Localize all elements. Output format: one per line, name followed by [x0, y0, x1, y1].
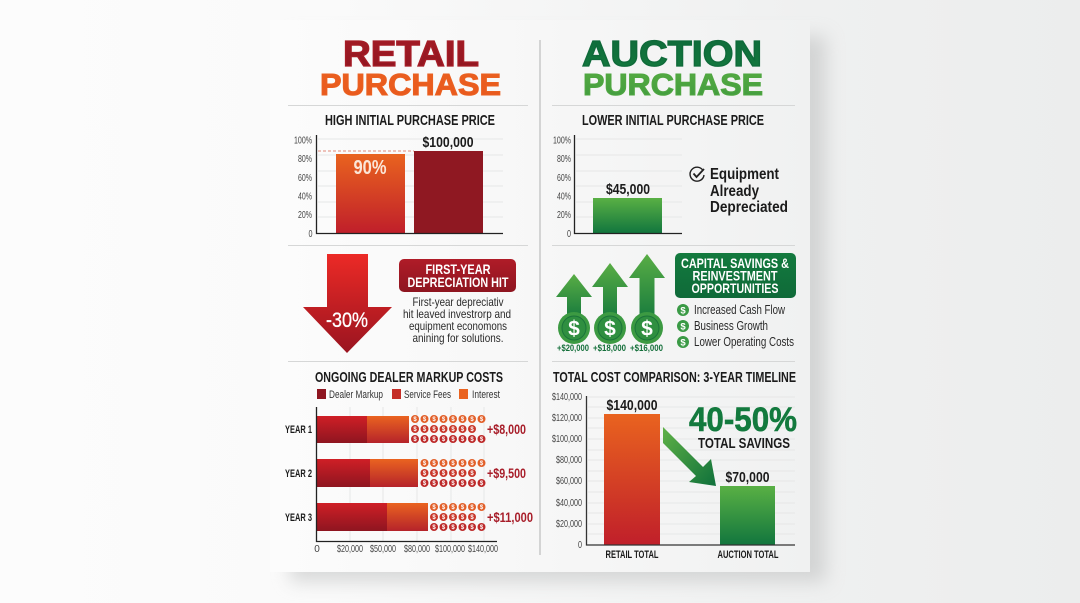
coins: year 2: $ [480, 461, 484, 467]
bar chart: total cost comparison: AUCTION TOTAL [718, 549, 779, 561]
coins: year 2: $ [451, 461, 455, 467]
bar chart: total cost comparison: $20,000 [556, 519, 582, 530]
heading: ongoing dealer markup costs: ONGOING DEALER MARKUP COSTS [315, 369, 503, 386]
coins: year 2: $ [442, 481, 446, 487]
badge: first-year depreciation hit: DEPRECIATION HIT [408, 274, 509, 290]
coins: year 2: $ [423, 461, 427, 467]
year 3 bar [317, 503, 428, 531]
coins: year 1: $ [470, 417, 474, 423]
coins: year 1: $ [461, 417, 465, 423]
coins: year 1: $ [470, 437, 474, 443]
callout: equipment already depreciated [690, 166, 788, 216]
bar chart: total cost comparison: $140,000 [552, 392, 582, 403]
heading: lower initial purchase price: LOWER INITIAL PURCHASE PRICE [582, 112, 764, 129]
heading: high initial purchase price: HIGH INITIAL PURCHASE PRICE [325, 112, 495, 129]
bar chart: retail initial price: $100,000 [422, 134, 474, 151]
callout: total savings: TOTAL SAVINGS [698, 435, 790, 452]
legend: markup costs [317, 389, 500, 401]
coins: year 1: $ [442, 437, 446, 443]
coins: year 3: $ [470, 505, 474, 511]
list: reinvestment benefits: Lower Operating Costs [694, 334, 794, 349]
coins: year 2: $ [470, 461, 474, 467]
page shadow [290, 36, 826, 582]
coins: year 3: $ [480, 505, 484, 511]
bar chart: total cost comparison: $120,000 [552, 413, 582, 424]
coins: year 2: $ [470, 481, 474, 487]
bar chart: retail initial price: 60% [298, 173, 312, 184]
coins: year 1: $ [413, 427, 417, 433]
bar chart: total cost comparison: $70,000 [726, 469, 770, 486]
icon: check mark [690, 167, 704, 181]
arrow: minus 30 percent: -30% [326, 309, 368, 332]
list: reinvestment benefits: Increased Cash Flow [694, 302, 785, 317]
bar chart: dealer markup by year: $20,000 [337, 544, 363, 555]
badge: capital savings: CAPITAL SAVINGS & [681, 255, 789, 271]
coins: year 2: $ [442, 471, 446, 477]
coins: year 1: $ [442, 427, 446, 433]
icon: growth arrows with coins: +$18,000 [593, 343, 626, 354]
title: auction purchase: PURCHASE [583, 67, 763, 102]
callout: equipment already depreciated: Depreciated [710, 199, 788, 216]
coins: year 2: $ [432, 461, 436, 467]
title: auction purchase: AUCTION [582, 33, 762, 74]
coins: year 3: $ [461, 505, 465, 511]
bar chart: auction initial price: 100% [553, 136, 571, 146]
bar chart: retail initial price: 40% [298, 192, 312, 202]
coins: year 1: $ [461, 427, 465, 433]
callout: total savings: 40-50% [689, 401, 797, 439]
coins: year 2: $ [423, 481, 427, 487]
bar chart: dealer markup by year: $100,000 [435, 544, 465, 555]
icon: growth arrows with coins: $ [604, 318, 616, 340]
bar chart: retail initial price: 20% [298, 210, 312, 221]
coins: year 2: $ [461, 471, 465, 477]
coins: year 3: $ [470, 525, 474, 531]
coins: year 3: $ [432, 505, 436, 511]
bar chart: dealer markup by year: +$8,000 [487, 421, 526, 437]
coins: year 1: $ [423, 417, 427, 423]
bar chart: total cost comparison [552, 392, 795, 561]
coins: year 2: $ [432, 481, 436, 487]
coins: year 3: $ [442, 515, 446, 521]
panel: infographic sheet [270, 20, 810, 572]
bar chart: total cost comparison: $140,000 [606, 397, 658, 414]
bar chart: auction initial price: 40% [557, 192, 571, 202]
coins: year 2: $ [451, 481, 455, 487]
icon: growth arrows with coins: $ [568, 318, 580, 340]
bar chart: dealer markup by year: +$11,000 [487, 509, 533, 525]
coins: year 3: $ [442, 525, 446, 531]
list: reinvestment benefits: $ [680, 322, 686, 332]
icon: growth arrows with coins: +$16,000 [630, 343, 663, 354]
title: retail purchase [320, 33, 501, 102]
title: auction purchase [582, 33, 763, 102]
bar chart: retail initial price: 100% [294, 136, 312, 146]
coins: year 1: $ [432, 427, 436, 433]
coins: year 1: $ [432, 437, 436, 443]
coins: year 2: $ [451, 471, 455, 477]
coins: year 3: $ [461, 515, 465, 521]
callout: equipment already depreciated: Equipment [710, 166, 780, 183]
bar chart: total cost comparison: 0 [578, 540, 582, 551]
bar chart: total cost comparison: RETAIL TOTAL [606, 549, 659, 561]
coins: year 1: $ [423, 427, 427, 433]
arrow: retail to auction savings [663, 427, 716, 486]
title: retail purchase: RETAIL [343, 33, 479, 74]
icon: growth arrows with coins: +$20,000 [557, 343, 589, 354]
bar chart: auction initial price: 20% [557, 210, 571, 221]
coins: year 1: $ [432, 417, 436, 423]
coins: year 1: $ [451, 417, 455, 423]
coins: year 3: $ [432, 525, 436, 531]
bar chart: dealer markup by year: YEAR 1 [285, 424, 312, 436]
coins: year 1: $ [442, 417, 446, 423]
icon: growth arrows with coins [556, 254, 665, 354]
coins: year 2 [420, 459, 486, 487]
bar chart: total cost comparison: $80,000 [556, 455, 582, 466]
legend: markup costs: Interest [472, 389, 500, 401]
coins: year 3: $ [451, 515, 455, 521]
year 2 bar [317, 459, 418, 487]
bar chart: dealer markup by year: YEAR 2 [285, 468, 312, 480]
bar chart: dealer markup by year: $140,000 [468, 544, 498, 555]
coins: year 3: $ [461, 525, 465, 531]
coins: year 3: $ [451, 525, 455, 531]
coins: year 2: $ [480, 481, 484, 487]
list: reinvestment benefits: Business Growth [694, 318, 768, 333]
bar chart: auction initial price [553, 135, 682, 240]
list: reinvestment benefits: $ [680, 338, 686, 348]
bar chart: total cost comparison: $40,000 [556, 498, 582, 509]
bar chart: auction initial price: 80% [557, 154, 571, 165]
bar chart: dealer markup by year: $80,000 [404, 544, 430, 555]
badge: capital savings: OPPORTUNITIES [692, 280, 778, 296]
coins: year 2: $ [423, 471, 427, 477]
heading: total cost comparison: TOTAL COST COMPARISON: 3-YEAR TIMELINE [553, 369, 796, 386]
coins: year 3 [430, 503, 486, 531]
bar chart: auction initial price: $45,000 [606, 181, 650, 198]
bar chart: dealer markup by year: YEAR 3 [285, 512, 312, 524]
bar chart: dealer markup by year: $50,000 [370, 544, 396, 555]
list: reinvestment benefits: $ [680, 306, 686, 316]
badge: capital savings [675, 253, 796, 298]
badge: first-year depreciation hit: FIRST-YEAR [426, 261, 490, 277]
coins: year 1: $ [470, 427, 474, 433]
coins: year 1: $ [451, 437, 455, 443]
coins: year 1: $ [461, 437, 465, 443]
bar chart: total cost comparison: $100,000 [552, 434, 582, 445]
badge: capital savings: REINVESTMENT [692, 268, 778, 284]
text block: depreciation description: First-year depreciativ [412, 295, 504, 309]
coins: year 3: $ [470, 515, 474, 521]
coins: year 2: $ [432, 471, 436, 477]
coins: year 1: $ [423, 437, 427, 443]
coins: year 2: $ [442, 461, 446, 467]
title: retail purchase: PURCHASE [320, 67, 501, 102]
coins: year 3: $ [451, 505, 455, 511]
bar chart: retail initial price [294, 134, 503, 240]
bar chart: auction initial price: 0 [567, 229, 571, 240]
coins: year 1: $ [413, 437, 417, 443]
coins: year 2: $ [470, 471, 474, 477]
coins: year 1: $ [480, 417, 484, 423]
coins: year 1 [411, 415, 486, 443]
text block: depreciation description: hit leaved investrorp and [403, 307, 511, 321]
bar chart: dealer markup by year: 0 [314, 544, 320, 555]
coins: year 2: $ [461, 461, 465, 467]
legend: markup costs: Dealer Markup [329, 389, 383, 401]
callout: equipment already depreciated: Already [710, 183, 759, 200]
coins: year 3: $ [480, 525, 484, 531]
bar chart: auction initial price: 60% [557, 173, 571, 184]
text block: depreciation description [403, 295, 511, 345]
coins: year 2: $ [461, 481, 465, 487]
legend: markup costs: Service Fees [404, 389, 451, 401]
coins: year 1: $ [413, 417, 417, 423]
coins: year 3: $ [442, 505, 446, 511]
arrow: minus 30 percent [303, 254, 392, 353]
coins: year 1: $ [451, 427, 455, 433]
bar chart: total cost comparison: $60,000 [556, 476, 582, 487]
bar chart: dealer markup by year: +$9,500 [487, 465, 526, 481]
year 1 bar [317, 416, 409, 443]
bar chart: retail initial price: 90% [354, 157, 387, 179]
badge: first-year depreciation hit [399, 259, 516, 292]
text block: depreciation description: equipment economons [409, 319, 507, 333]
bar chart: retail initial price: 80% [298, 154, 312, 165]
list: reinvestment benefits [677, 302, 794, 349]
icon: growth arrows with coins: $ [641, 318, 653, 340]
bar chart: dealer markup by year [285, 407, 533, 555]
bar chart: retail initial price: 0 [308, 229, 313, 240]
coins: year 3: $ [432, 515, 436, 521]
coins: year 1: $ [480, 437, 484, 443]
text block: depreciation description: anining for solutions. [412, 331, 504, 345]
